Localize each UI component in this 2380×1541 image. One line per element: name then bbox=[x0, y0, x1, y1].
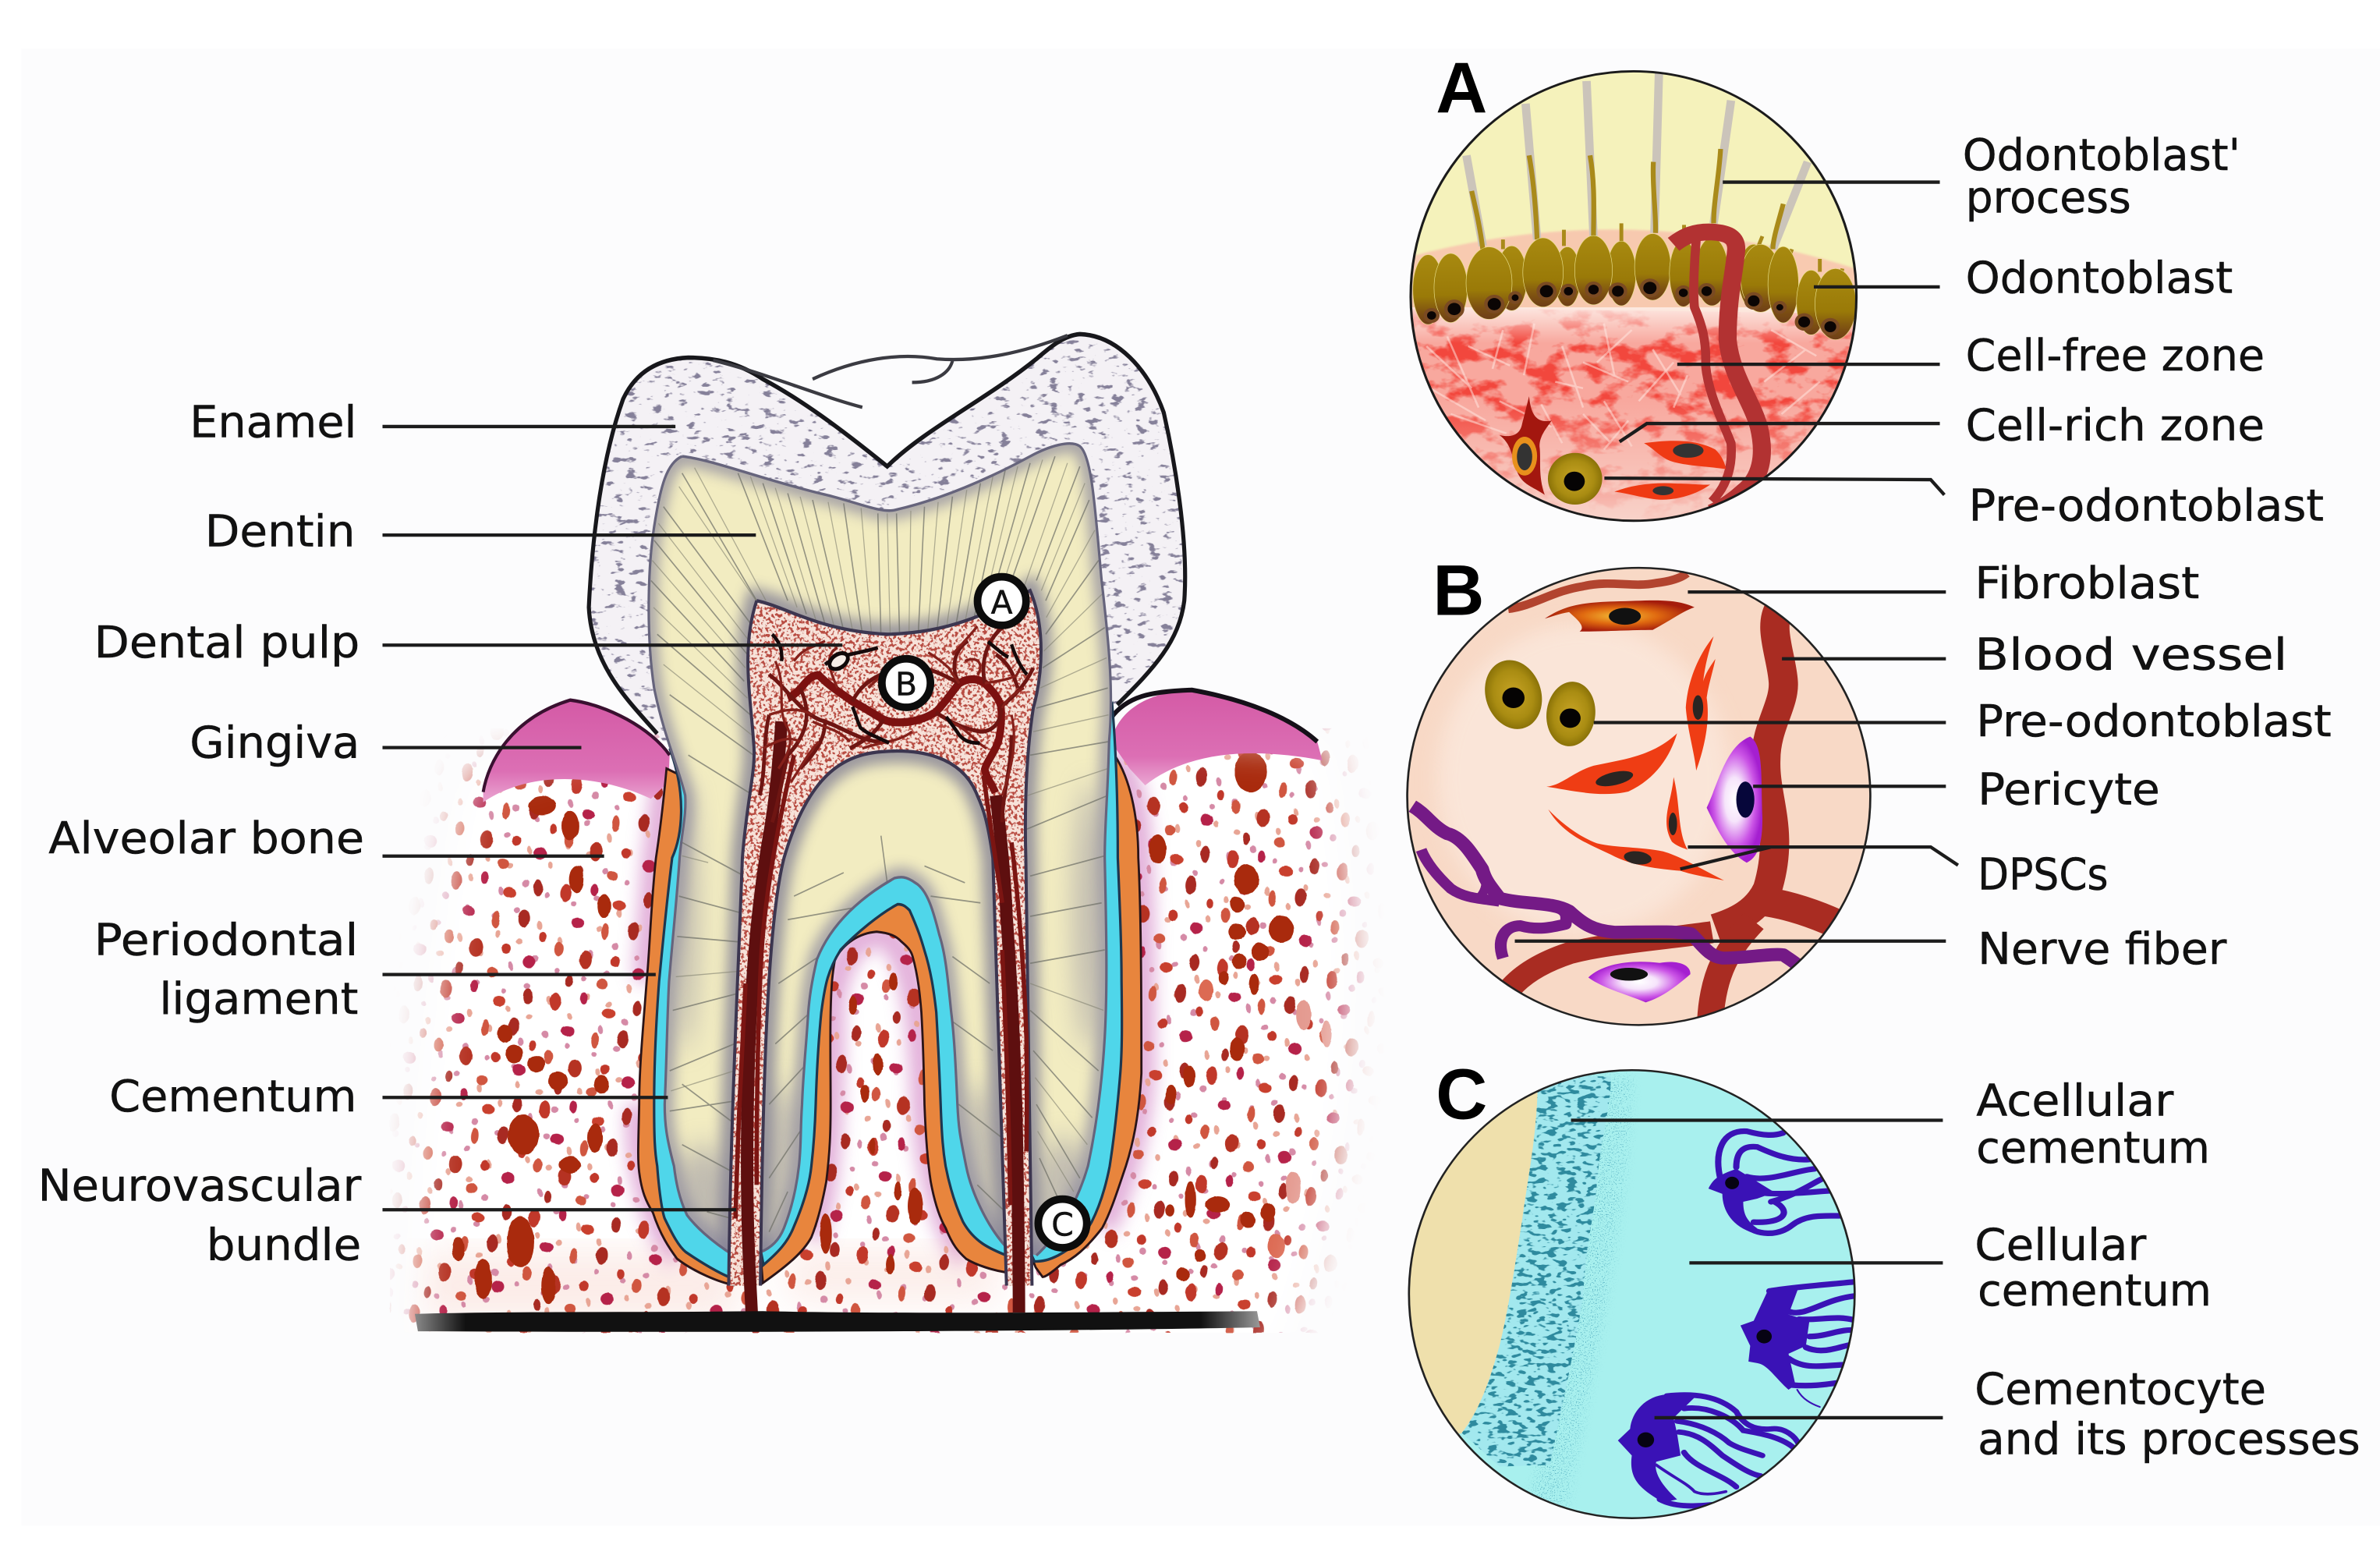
left labels: Dental pulp bbox=[94, 618, 359, 668]
badge A: A bbox=[991, 583, 1013, 621]
pre-odontoblast bbox=[1548, 453, 1603, 505]
panel: circle C cementum bbox=[1405, 1061, 1861, 1531]
odontoblast cells bbox=[1413, 234, 1856, 340]
badge B: B bbox=[895, 665, 917, 703]
left labels: bundle bbox=[207, 1220, 361, 1271]
badge B bbox=[882, 659, 930, 707]
left labels: Neurovascular bbox=[38, 1161, 362, 1212]
fibroblast top bbox=[1545, 600, 1695, 632]
cementocyte 2 bbox=[1741, 1281, 1857, 1407]
labels A: process bbox=[1966, 172, 2131, 223]
leader lines A bbox=[1604, 182, 1944, 495]
cementocyte 1 bbox=[1709, 1131, 1840, 1233]
labels A: Cell-rich zone bbox=[1966, 400, 2265, 451]
fibroblasts bbox=[1614, 441, 1726, 500]
labels B: DPSCs bbox=[1978, 850, 2109, 901]
heading A: A bbox=[1436, 48, 1487, 128]
badge A bbox=[978, 577, 1026, 625]
labels B: Pre-odontoblast bbox=[1976, 696, 2332, 747]
left labels: Enamel bbox=[189, 398, 356, 448]
labels A: Cell-free zone bbox=[1966, 331, 2265, 381]
base line bbox=[415, 1311, 1260, 1332]
pericytes bbox=[1588, 737, 1762, 1002]
dentin bbox=[647, 442, 1112, 1256]
alveolar bone bbox=[390, 728, 1384, 1333]
left labels: Periodontal bbox=[94, 915, 358, 965]
heading C: C bbox=[1436, 1055, 1487, 1135]
labels C: Cementocyte bbox=[1974, 1364, 2266, 1415]
odontoblast processes bbox=[1466, 71, 1843, 275]
heading B: B bbox=[1433, 551, 1484, 630]
nerve fiber bbox=[1412, 806, 1799, 966]
labels C: Cellular bbox=[1974, 1220, 2147, 1271]
labels B bbox=[1974, 558, 2332, 975]
left leader lines bbox=[383, 427, 842, 1210]
cementum bbox=[654, 705, 1122, 1279]
blood vessel bbox=[1673, 232, 1762, 512]
labels C: and its processes bbox=[1978, 1415, 2361, 1465]
labels A: Odontoblast' bbox=[1963, 130, 2240, 181]
labels B: Fibroblast bbox=[1974, 558, 2199, 609]
dentin edge bbox=[1405, 1067, 1539, 1433]
leader lines B bbox=[1515, 592, 1958, 941]
dental pulp bbox=[728, 590, 1041, 1313]
labels C: cementum bbox=[1976, 1123, 2210, 1174]
badge C: C bbox=[1051, 1206, 1074, 1243]
labels C: cementum bbox=[1978, 1266, 2212, 1316]
leader lines C bbox=[1571, 1120, 1943, 1418]
panel: circle B dental pulp bbox=[1402, 562, 1879, 1031]
badge C bbox=[1038, 1199, 1087, 1248]
labels A: Pre-odontoblast bbox=[1969, 481, 2324, 532]
labels B: Pericyte bbox=[1978, 765, 2160, 816]
panel: circle A odontoblast layer bbox=[1402, 68, 1865, 530]
left labels: Dentin bbox=[205, 507, 355, 558]
left labels bbox=[38, 398, 364, 1271]
top vessel bbox=[1508, 573, 1687, 609]
gingiva bbox=[483, 690, 1323, 802]
periodontal ligament bbox=[638, 752, 1142, 1285]
blood vessel network bbox=[1510, 608, 1837, 1025]
dotted transition bbox=[1493, 1061, 1702, 1531]
left labels: Alveolar bone bbox=[48, 813, 364, 864]
cementocyte 3 bbox=[1618, 1394, 1799, 1506]
tooth diagram bbox=[390, 334, 1384, 1333]
enamel bbox=[589, 334, 1185, 742]
labels B: Blood vessel bbox=[1974, 629, 2287, 680]
left labels: Cementum bbox=[109, 1072, 356, 1122]
labels C bbox=[1974, 1076, 2361, 1465]
DPSC spindles bbox=[1546, 636, 1724, 880]
pre-odontoblasts bbox=[1485, 660, 1596, 746]
labels A: Odontoblast bbox=[1966, 253, 2233, 304]
star cell bbox=[1500, 396, 1552, 495]
labels A bbox=[1963, 130, 2324, 532]
labels C: Acellular bbox=[1976, 1076, 2174, 1127]
left labels: ligament bbox=[159, 974, 358, 1025]
labels B: Nerve fiber bbox=[1978, 924, 2227, 975]
left labels: Gingiva bbox=[189, 717, 359, 768]
granular layer bbox=[1462, 1076, 1611, 1466]
